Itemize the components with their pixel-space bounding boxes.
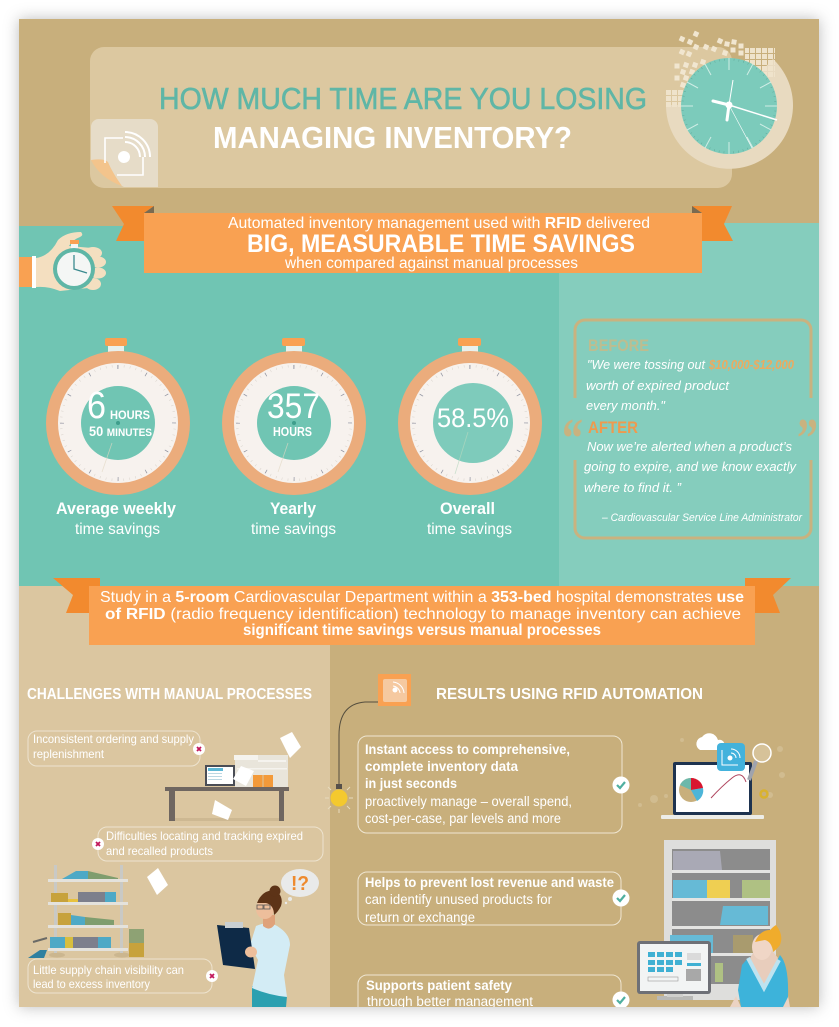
- illustration: confused woman with clipboard: [217, 869, 319, 1007]
- ribbon banner: study summary: [53, 578, 791, 645]
- callout: supply chain visibility: Little supply chain visibility can: [33, 963, 184, 977]
- result card: prevent lost revenue: return or exchange: [365, 910, 475, 925]
- testimonial panel: before and after quote: BEFORE: [588, 337, 649, 355]
- stopwatch: average weekly time savings: [46, 338, 190, 538]
- icon: light bulb: [325, 784, 353, 813]
- testimonial panel: before and after quote: Now we’re alerted when a product’s: [587, 439, 792, 454]
- ribbon banner: study summary: significant time savings versus manual processes: [243, 622, 601, 639]
- result card: prevent lost revenue: [358, 872, 630, 925]
- illustration: cluttered supply shelf: [28, 865, 144, 958]
- stopwatch: overall time savings: [398, 338, 542, 538]
- value: 357 hours: HOURS: [273, 425, 312, 439]
- label: time savings: [427, 521, 512, 538]
- label: [251, 499, 336, 538]
- value: 58.5%: 58.5%: [437, 403, 509, 433]
- testimonial panel: before and after quote: worth of expired product: [586, 378, 730, 393]
- result card: patient safety: [358, 974, 630, 1007]
- result card: prevent lost revenue: Helps to prevent lost revenue and waste: [365, 875, 614, 890]
- header panel: [90, 47, 732, 188]
- result card: instant access: complete inventory data: [365, 759, 518, 774]
- illustration: inventory terminal: [637, 941, 711, 1000]
- label: [56, 499, 177, 538]
- result card: instant access: in just seconds: [365, 776, 457, 791]
- title: HOW MUCH TIME ARE YOU LOSING: [159, 81, 647, 116]
- label: Average weekly: [56, 499, 177, 518]
- testimonial panel: before and after quote: – Cardiovascular Service Line Administrator: [601, 512, 803, 524]
- ribbon banner: time savings: when compared against manual processes: [284, 255, 578, 272]
- ribbon banner: study summary: of RFID (radio frequency identification) technology to manage inventory can achieve: [105, 606, 741, 623]
- ribbon banner: time savings: [112, 206, 733, 273]
- illustration: organised shelving unit: [664, 840, 776, 1000]
- heading: results: RESULTS USING RFID AUTOMATION: [436, 686, 703, 703]
- icon: closing quotation mark: ”: [797, 408, 818, 470]
- result card: patient safety: Supports patient safety: [366, 978, 512, 993]
- ribbon banner: study summary: Study in a 5-room Cardiovascular Department within a 353-bed hospital demonstrates use: [100, 589, 744, 606]
- title: [161, 88, 646, 148]
- ribbon banner: time savings: Automated inventory management used with RFID delivered: [228, 215, 650, 232]
- heading: challenges: CHALLENGES WITH MANUAL PROCESSES: [27, 686, 312, 703]
- callout: supply chain visibility: lead to excess inventory: [33, 977, 150, 991]
- result card: instant access: [358, 736, 630, 833]
- title: MANAGING INVENTORY?: [213, 120, 572, 155]
- testimonial panel: before and after quote: $10,000-$12,000: [708, 357, 795, 372]
- value: 6 hours 50 minutes: [88, 392, 152, 436]
- callout: locating expired products: Difficulties locating and tracking expired: [106, 829, 303, 843]
- label: [427, 499, 512, 538]
- illustration: cluttered desk: [165, 732, 301, 821]
- teal background panels: [19, 223, 819, 586]
- result card: prevent lost revenue: can identify unused products for: [365, 892, 552, 907]
- value: 6 hours 50 minutes: 50 MINUTES: [89, 423, 152, 439]
- value: 6 hours 50 minutes: HOURS: [110, 408, 150, 422]
- lower background panels: [19, 586, 330, 1007]
- testimonial panel: before and after quote: AFTER: [588, 418, 638, 437]
- label: Overall: [440, 499, 495, 518]
- testimonial panel: before and after quote: going to expire, and we know exactly: [584, 459, 797, 474]
- illustration: flying paper: [147, 868, 168, 895]
- value: 357 hours: 357: [267, 387, 320, 426]
- ribbon banner: time savings: BIG, MEASURABLE TIME SAVINGS: [247, 230, 635, 258]
- callout: locating expired products: [92, 827, 323, 861]
- value: 357 hours: [268, 393, 318, 436]
- testimonial panel: before and after quote: every month.": [586, 398, 666, 413]
- callout: supply chain visibility: [28, 959, 218, 993]
- label: time savings: [251, 521, 336, 538]
- label: Yearly: [270, 499, 316, 518]
- icon: RFID tag with curled corner: [91, 119, 158, 187]
- callout: inconsistent ordering: [28, 731, 205, 766]
- callout: inconsistent ordering: replenishment: [33, 747, 105, 761]
- stopwatch: yearly time savings: [222, 338, 366, 538]
- illustration: laptop analytics with RFID: [638, 733, 785, 819]
- testimonial panel: before and after quote: [562, 320, 818, 538]
- testimonial panel: before and after quote: "We were tossing out: [587, 357, 706, 372]
- speech bubble: !?: [291, 873, 309, 895]
- connector line to light bulb: [339, 702, 378, 785]
- callout: locating expired products: and recalled products: [106, 844, 213, 858]
- result card: instant access: cost-per-case, par levels and more: [365, 811, 561, 826]
- icon: hand holding stopwatch: [19, 232, 106, 291]
- label: time savings: [75, 521, 160, 538]
- icon: wall clock with dissolving pixels: [666, 31, 793, 169]
- icon: opening quotation mark: “: [562, 408, 583, 470]
- testimonial panel: before and after quote: where to find it. ”: [584, 480, 682, 495]
- value: 6 hours 50 minutes: 6: [87, 385, 106, 427]
- icon: orange RFID tag: [378, 674, 411, 706]
- result card: instant access: Instant access to comprehensive,: [365, 742, 570, 757]
- callout: inconsistent ordering: Inconsistent ordering and supply: [33, 732, 194, 746]
- result card: instant access: proactively manage – overall spend,: [365, 794, 572, 809]
- illustration: nurse using terminal: [730, 925, 790, 1007]
- result card: patient safety: through better management: [367, 994, 533, 1009]
